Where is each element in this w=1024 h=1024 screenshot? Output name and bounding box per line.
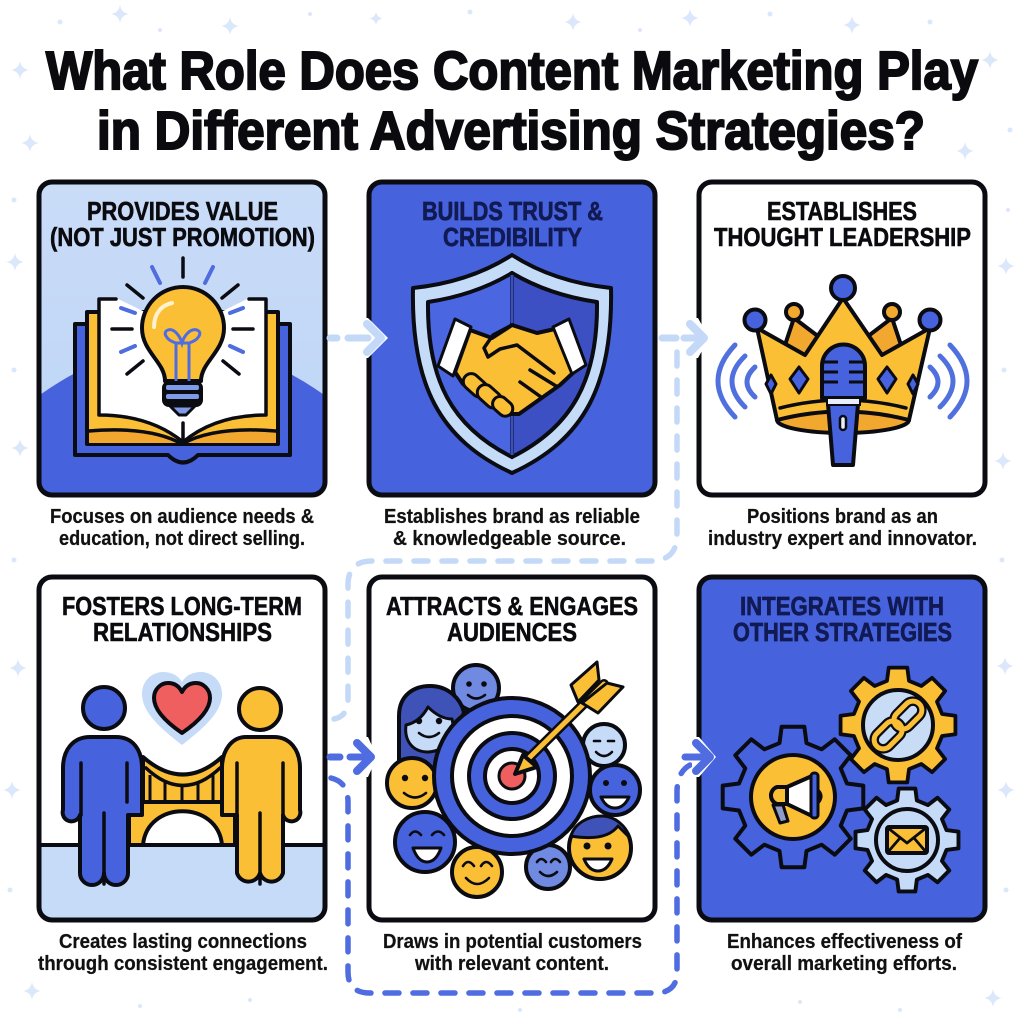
icon: audience faces	[387, 665, 640, 897]
arrow: builds trust to thought leadership	[662, 318, 709, 358]
icon: shield with handshake	[413, 255, 611, 473]
panel: provides value	[37, 182, 327, 497]
handshake	[438, 319, 586, 419]
heading: thought leadership: THOUGHT LEADERSHIP	[714, 222, 971, 252]
caption: thought leadership: Positions brand as an	[747, 506, 938, 528]
dashed connector: attracts to integrates	[331, 765, 690, 993]
icon: open book with light bulb	[75, 258, 290, 462]
caption: integrates	[727, 931, 962, 975]
heading: relationships	[62, 591, 302, 647]
heading: builds trust: BUILDS TRUST &	[422, 196, 603, 226]
heading: attracts	[386, 591, 638, 647]
icon: blue gear with megaphone	[723, 727, 863, 867]
icon: crown with microphone	[744, 276, 940, 465]
icon: heart	[142, 672, 222, 745]
heading: integrates	[733, 591, 952, 647]
heading: integrates: OTHER STRATEGIES	[733, 617, 952, 647]
caption: provides value: Focuses on audience needs &	[50, 506, 314, 528]
icon: yellow person	[222, 688, 300, 884]
panel: thought leadership	[699, 182, 985, 495]
icon: arrow	[515, 662, 623, 774]
icon: bridge	[129, 757, 235, 845]
heading: provides value: (NOT JUST PROMOTION)	[50, 222, 315, 252]
caption: attracts: with relevant content.	[414, 953, 609, 975]
caption: attracts: Draws in potential customers	[383, 931, 642, 953]
icon: target	[434, 698, 590, 854]
caption: provides value	[50, 506, 314, 550]
caption: builds trust: & knowledgeable source.	[393, 528, 626, 550]
heading: builds trust	[422, 196, 603, 252]
caption: relationships: through consistent engagement.	[38, 953, 328, 975]
panel: attracts audiences	[369, 577, 655, 920]
heading: attracts: ATTRACTS & ENGAGES	[386, 591, 638, 621]
caption: relationships	[38, 931, 328, 975]
icon: blue person	[63, 687, 142, 885]
caption: thought leadership	[708, 506, 977, 550]
arrow: into integrates	[685, 737, 716, 777]
light rays	[112, 258, 253, 374]
caption: provides value: education, not direct selling.	[59, 528, 305, 550]
caption: attracts	[383, 931, 642, 975]
light bulb	[142, 287, 224, 415]
panel: integrates	[699, 577, 985, 920]
panel: builds trust	[369, 182, 655, 495]
caption: integrates: Enhances effectiveness of	[727, 931, 962, 953]
heading: builds trust: CREDIBILITY	[443, 222, 582, 252]
caption: integrates: overall marketing efforts.	[731, 953, 957, 975]
caption: thought leadership: industry expert and innovator.	[708, 528, 977, 550]
icon: sound waves	[718, 345, 967, 417]
arrow: relationships to attracts	[330, 737, 377, 777]
heading: relationships: FOSTERS LONG-TERM	[62, 591, 302, 621]
caption: builds trust: Establishes brand as reliable	[384, 506, 640, 528]
caption: relationships: Creates lasting connections	[59, 931, 307, 953]
icon: yellow gear with chain	[841, 668, 955, 782]
heading: provides value	[50, 196, 315, 252]
title: in Different Advertising Strategies?	[97, 101, 925, 161]
heading: thought leadership	[714, 196, 971, 252]
heading: relationships: RELATIONSHIPS	[93, 617, 272, 647]
heading: thought leadership: ESTABLISHES	[767, 196, 917, 226]
heading: integrates: INTEGRATES WITH	[740, 591, 944, 621]
heading: attracts: AUDIENCES	[447, 617, 577, 647]
microphone	[822, 344, 865, 465]
caption: builds trust	[384, 506, 640, 550]
dashed connector: thought leadership to relationships	[334, 352, 677, 719]
panel: long-term relationships	[37, 577, 327, 922]
title	[46, 41, 978, 161]
heading: provides value: PROVIDES VALUE	[87, 196, 278, 226]
arrow: provides value to builds trust	[330, 318, 388, 358]
icon: light gear with envelope	[856, 789, 958, 891]
